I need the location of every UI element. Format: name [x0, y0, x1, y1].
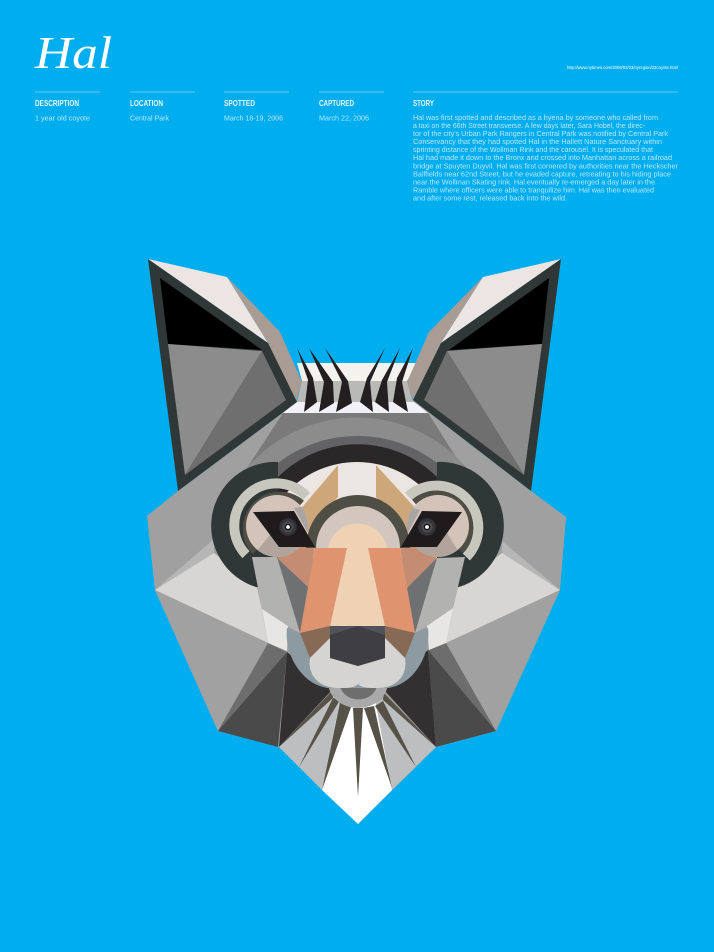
column: location: Central Park [130, 116, 169, 122]
column: story: and after some rest, released back into the wild. [413, 196, 567, 202]
head base [147, 400, 566, 824]
left cheek panels [155, 539, 332, 747]
column: story: a taxi on the 66th Street transverse. A few days later, Sara Hobel, the direc- [413, 123, 646, 130]
source url: http://www.nytimes.com/2006/03/23/nyregion/23coyote.html [567, 65, 678, 70]
column: spotted [224, 92, 289, 122]
left ear [148, 259, 302, 491]
column: story: sprinting distance of the Wollman Rink and the carousel. It is speculated that [413, 147, 653, 154]
column: captured: March 22, 2006 [319, 116, 369, 122]
column: story: STORY [413, 98, 434, 108]
column: location [130, 92, 195, 122]
column: story: tor of the city's Urban Park Rangers in Central Park was notified by Central Park [413, 131, 669, 138]
column: captured [319, 92, 384, 122]
throat ruff [279, 691, 436, 824]
left eye [246, 495, 315, 557]
right ear [407, 259, 561, 491]
right eye rings [408, 486, 478, 557]
eye patches [211, 462, 504, 590]
column: story: Conservancy that they had spotted Hal in the Hallett Nature Sanctuary within [413, 139, 662, 146]
left eye rings [234, 483, 307, 555]
column: description: DESCRIPTION [35, 98, 79, 108]
column: story: bridge at Spuyten Duyvil. Hal was first cornered by authorities near the Heckscher [413, 163, 679, 170]
column: spotted: SPOTTED [224, 98, 255, 108]
nose stripes [300, 548, 415, 633]
muzzle [287, 626, 428, 688]
right cheek panels [384, 541, 560, 747]
column: location: LOCATION [130, 98, 163, 108]
tan brow wedges [298, 465, 417, 533]
column: story: Ramble where officers were able to tranquilize him. Hal was then evaluated [413, 187, 654, 194]
column: spotted: March 18-19, 2006 [224, 116, 283, 122]
column: description [35, 92, 100, 122]
forehead band [283, 363, 428, 413]
column: story [413, 92, 679, 202]
forehead arcs [247, 413, 467, 558]
right eye [401, 495, 469, 557]
column: captured: CAPTURED [319, 98, 354, 108]
title: Hal [34, 27, 112, 78]
coyote head illustration [147, 259, 566, 824]
chin ring [328, 682, 388, 708]
column: story: Hal had made it down to the Bronx and crossed into Manhattan across a railroad [413, 155, 672, 162]
nose bridge rings [306, 495, 410, 548]
column: story: Ballfields near 62nd Street, but he evaded capture, retreating to his hiding place [413, 171, 671, 178]
column: description: 1 year old coyote [35, 116, 90, 122]
forehead fur spikes [297, 348, 413, 412]
column: story: near the Wollman Skating rink. Hal eventually re-emerged a day later in the [413, 179, 655, 186]
muzzle side panels [252, 547, 465, 651]
column: story: Hal was first spotted and described as a hyena by someone who called from [413, 115, 658, 122]
